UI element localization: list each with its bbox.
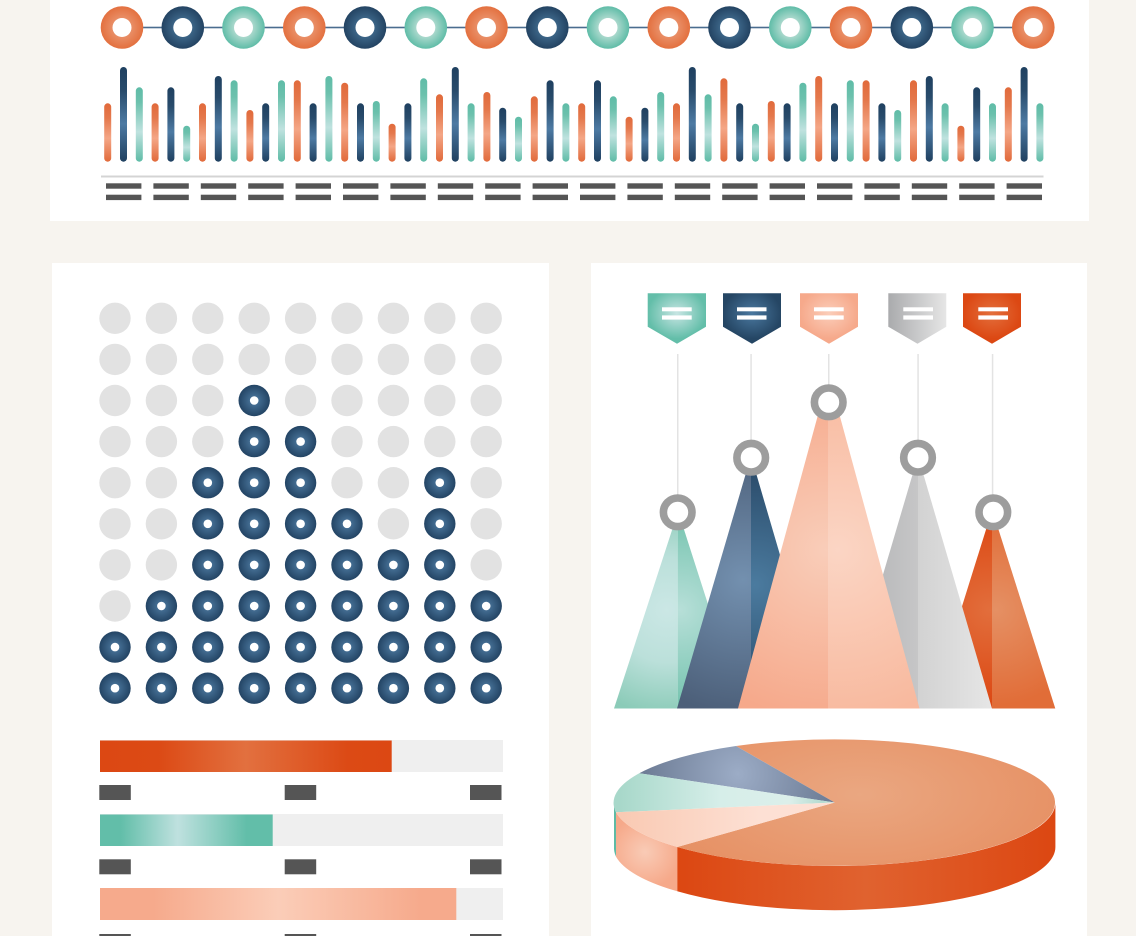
tag: navy xyxy=(723,293,781,344)
tag: teal xyxy=(648,293,706,344)
pie chart xyxy=(614,739,1055,910)
progress bar: orange xyxy=(99,740,503,800)
tag: orange xyxy=(963,293,1021,344)
progress bar: teal xyxy=(99,814,503,874)
dot matrix: inactive dots xyxy=(99,303,502,622)
connector line xyxy=(122,27,1033,28)
tag: gray xyxy=(888,293,946,344)
panel: top timeline and bars xyxy=(50,0,1089,221)
connector lines xyxy=(677,354,993,496)
bar chart xyxy=(104,67,1043,162)
pie slice: teal xyxy=(614,773,835,812)
pyramid: gray xyxy=(844,473,992,708)
pie side walls xyxy=(614,802,1055,910)
pie slice: navy xyxy=(639,746,835,802)
pyramid: teal xyxy=(614,528,742,708)
axis label placeholders xyxy=(106,183,1042,200)
marker rings xyxy=(663,388,1008,527)
pie slice: orange xyxy=(677,739,1055,866)
panel: dot matrix and progress bars xyxy=(52,263,549,936)
chart baseline xyxy=(101,176,1044,178)
pie slice: peach xyxy=(616,802,835,847)
tag: peach xyxy=(800,293,858,344)
timeline rings xyxy=(101,6,1055,49)
panel: pyramid chart and pie xyxy=(591,263,1087,936)
pyramid: orange xyxy=(930,528,1055,708)
progress bar: peach xyxy=(99,888,503,936)
pyramid: peach xyxy=(738,413,920,708)
pyramid: navy xyxy=(677,473,825,708)
dot matrix: active dots xyxy=(99,385,502,704)
